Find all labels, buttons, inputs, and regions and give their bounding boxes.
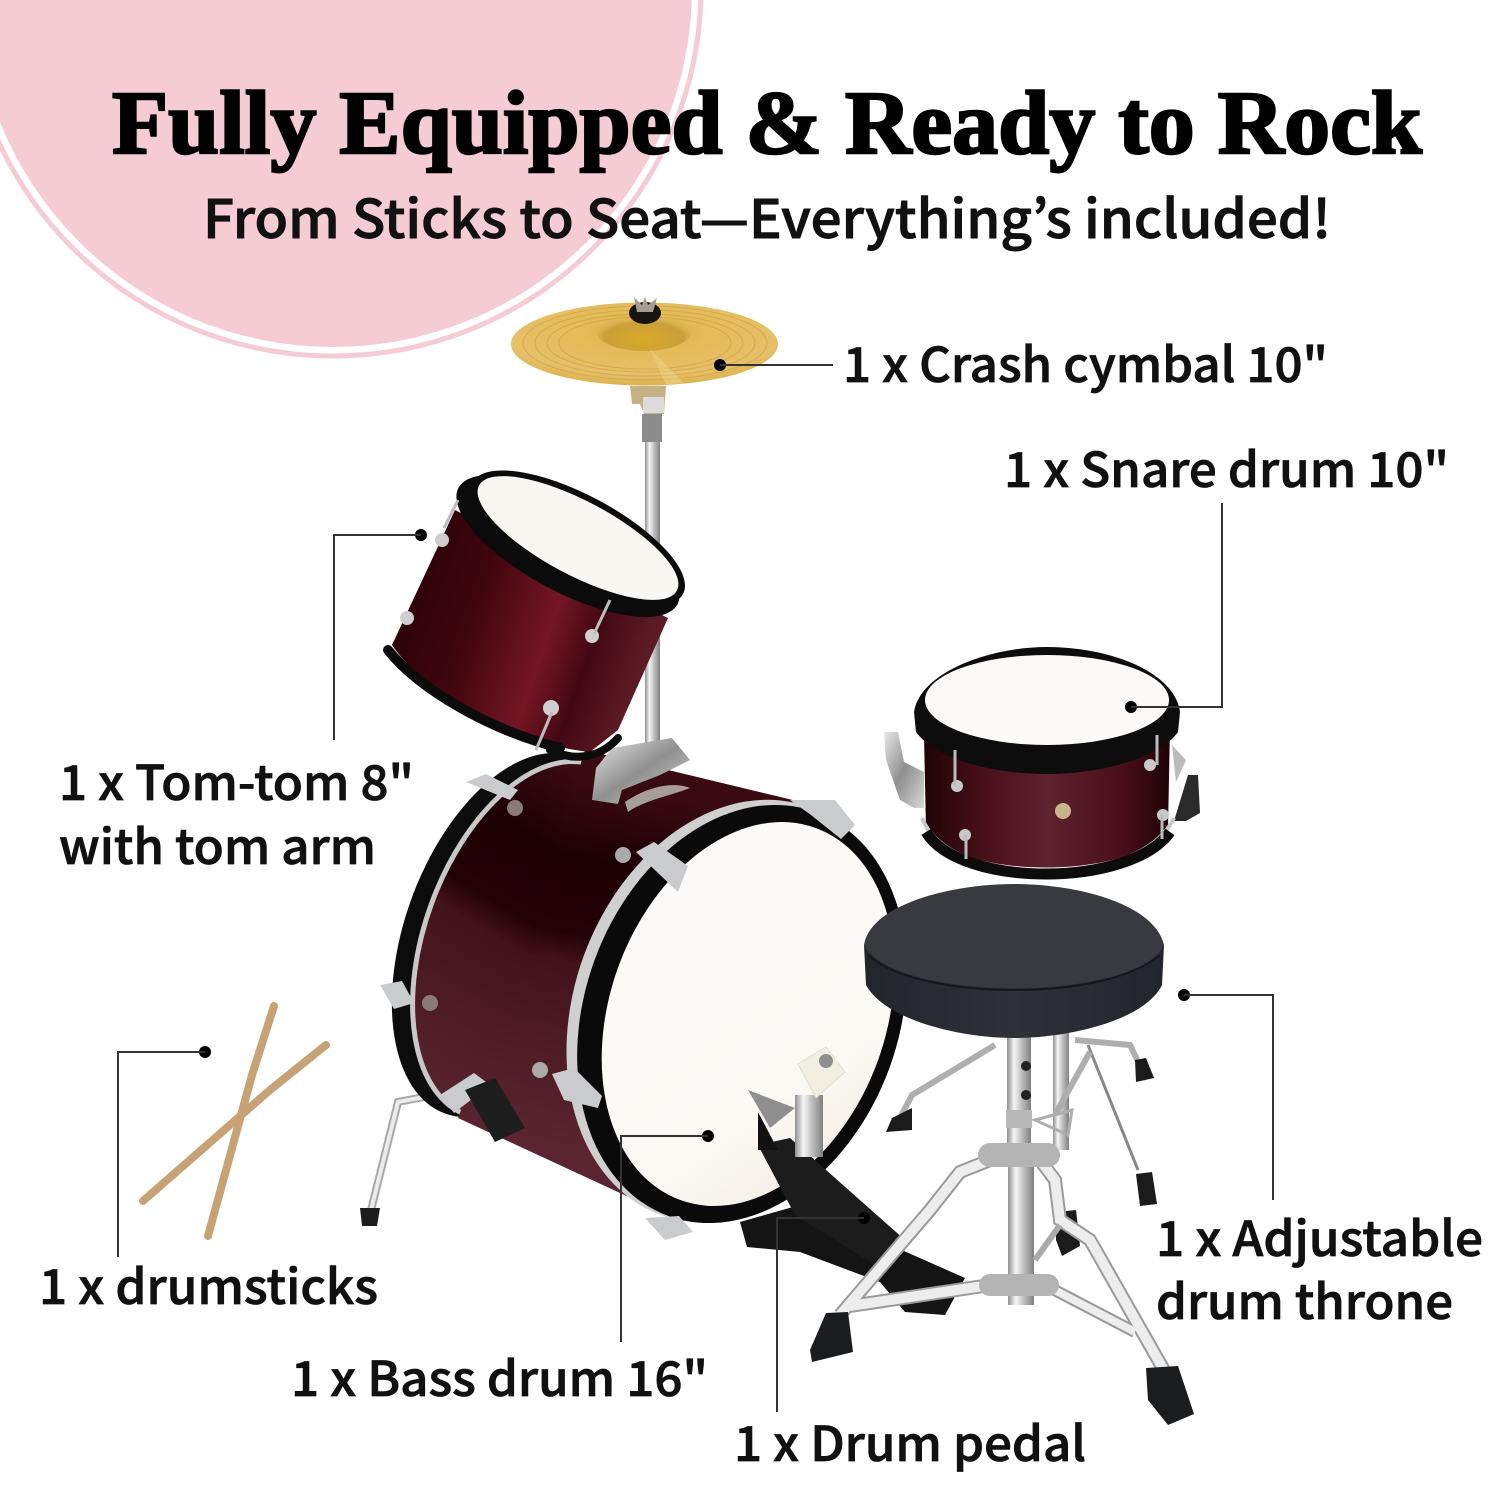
label: crash cymbal: 1 x Crash cymbal 10"	[843, 326, 1328, 396]
pointer: snare drum	[1125, 503, 1222, 713]
cymbal stand	[630, 386, 666, 755]
label: drum pedal: 1 x Drum pedal	[734, 1405, 1086, 1475]
tom shell	[392, 510, 668, 752]
label: drumsticks: 1 x drumsticks	[39, 1248, 378, 1318]
label: tom-tom	[59, 744, 414, 878]
throne rear feet	[886, 1058, 1157, 1256]
throne front feet	[810, 1312, 1194, 1425]
snare lugs	[951, 735, 1169, 859]
throne front legs	[840, 1155, 1165, 1372]
pointer: bass drum	[621, 1130, 714, 1342]
tom bottom hoop	[388, 650, 618, 757]
throne column	[1006, 1036, 1034, 1305]
pointer: drum throne	[1178, 989, 1273, 1200]
label: snare drum: 1 x Snare drum 10"	[1004, 431, 1449, 501]
bass drum	[346, 721, 963, 1270]
tom mount	[592, 738, 690, 812]
label: tom-tom: 1 x Tom-tom 8"	[59, 744, 414, 814]
snare hoop and head	[914, 647, 1180, 774]
drum throne	[810, 884, 1194, 1425]
snare drum	[884, 647, 1200, 874]
pedal beater	[748, 1047, 845, 1157]
pointer: crash cymbal	[714, 359, 833, 371]
label: bass drum: 1 x Bass drum 16"	[291, 1340, 708, 1410]
drum kit	[143, 297, 1200, 1425]
bass drum claws	[380, 774, 855, 1240]
snare mount	[884, 732, 1200, 821]
pink corner circle	[0, 0, 701, 356]
drumsticks	[143, 1006, 326, 1236]
tom top hoop and head	[437, 444, 703, 645]
pointer: drum pedal	[777, 1212, 870, 1412]
label: tom-tom: with tom arm	[59, 808, 376, 878]
crash cymbal	[511, 297, 778, 386]
label: drum throne	[1156, 1200, 1483, 1333]
pointer: tom-tom	[334, 529, 427, 740]
throne rear legs	[900, 1030, 1142, 1170]
tom-tom	[388, 444, 703, 757]
bass drum shell	[346, 721, 826, 1217]
snare shell	[924, 725, 1170, 868]
label: drum throne: 1 x Adjustable	[1156, 1200, 1483, 1270]
tom lugs	[400, 500, 610, 750]
pedal footboard	[758, 1138, 905, 1268]
drum pedal	[740, 1047, 965, 1315]
pointer: drumsticks	[118, 1046, 211, 1257]
title: Fully Equipped & Ready to Rock	[112, 74, 1422, 173]
bass drum front hoop	[509, 752, 963, 1270]
subtitle: From Sticks to Seat—Everything’s included!	[203, 178, 1331, 254]
throne seat	[864, 884, 1164, 1038]
pedal base	[740, 1205, 965, 1315]
label: drum throne: drum throne	[1156, 1263, 1453, 1333]
bass drum spur legs	[360, 1092, 450, 1226]
